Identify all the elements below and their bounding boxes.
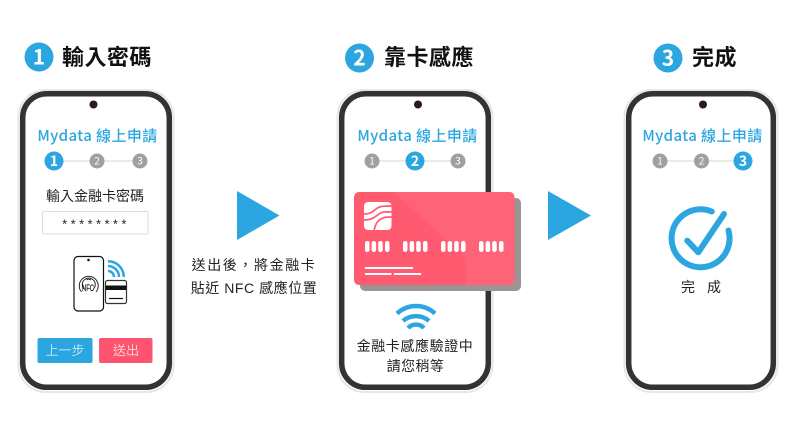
app title: Mydata 線上申請 bbox=[37, 125, 158, 146]
progress steps bbox=[44, 151, 148, 171]
status text bbox=[357, 338, 473, 374]
panel: step 1 enter password bbox=[18, 42, 174, 392]
button: submit: 送出 bbox=[113, 343, 139, 358]
icon: check mark bbox=[672, 209, 730, 267]
status text: 請您稍等 bbox=[387, 358, 444, 374]
phone frame 3 bbox=[624, 90, 778, 392]
progress steps: 3 bbox=[455, 152, 461, 168]
progress steps: 2 bbox=[94, 152, 100, 168]
phone frame 1 bbox=[18, 90, 174, 392]
instruction text: 貼近 NFC 感應位置 bbox=[191, 280, 317, 296]
heading: step 2: 2 bbox=[353, 42, 366, 72]
app title: Mydata 線上申請 bbox=[642, 125, 763, 146]
icon: NFC phone and card bbox=[74, 256, 126, 311]
arrow 1 bbox=[237, 191, 280, 240]
heading: step 2: 靠卡感應 bbox=[384, 45, 474, 70]
progress steps bbox=[364, 151, 466, 171]
app title: Mydata 線上申請 bbox=[357, 125, 478, 146]
card lines bbox=[365, 267, 421, 275]
heading: step 2 bbox=[345, 42, 474, 72]
heading: step 3 bbox=[654, 42, 737, 72]
progress steps: 2 bbox=[699, 152, 705, 168]
card number bbox=[365, 241, 504, 252]
button: previous: 上一步 bbox=[45, 343, 85, 358]
card chip bbox=[363, 202, 392, 231]
progress steps: 1 bbox=[50, 151, 58, 171]
heading: step 3: 完成 bbox=[692, 45, 737, 70]
heading: step 1: 輸入密碼 bbox=[62, 45, 152, 70]
arrow 2 bbox=[548, 191, 591, 240]
heading: step 1 bbox=[24, 42, 152, 72]
icon: NFC phone and card: NFC bbox=[82, 283, 94, 293]
progress steps: 3 bbox=[137, 152, 143, 168]
progress steps: 3 bbox=[739, 151, 747, 171]
completed text: 完成 bbox=[681, 279, 733, 295]
progress steps: 2 bbox=[411, 151, 419, 171]
button: submit bbox=[99, 338, 152, 363]
button: previous bbox=[38, 338, 92, 363]
credit card bbox=[354, 192, 521, 291]
icon: wifi bbox=[397, 306, 435, 328]
password input bbox=[42, 212, 148, 234]
progress steps bbox=[652, 151, 752, 171]
phone frame 2 bbox=[338, 90, 492, 392]
instruction text: 送出後，將金融卡 bbox=[192, 257, 316, 273]
panel: step 3 complete bbox=[624, 42, 778, 392]
panel: step 2 tap card bbox=[338, 42, 521, 392]
heading: step 1: 1 bbox=[33, 42, 45, 72]
progress steps: 1 bbox=[657, 152, 663, 168]
progress steps: 1 bbox=[369, 152, 375, 168]
instruction text bbox=[191, 257, 317, 296]
password label: 輸入金融卡密碼 bbox=[46, 188, 144, 204]
password input: ******** bbox=[62, 216, 130, 232]
status text: 金融卡感應驗證中 bbox=[357, 338, 473, 354]
heading: step 3: 3 bbox=[662, 42, 674, 72]
